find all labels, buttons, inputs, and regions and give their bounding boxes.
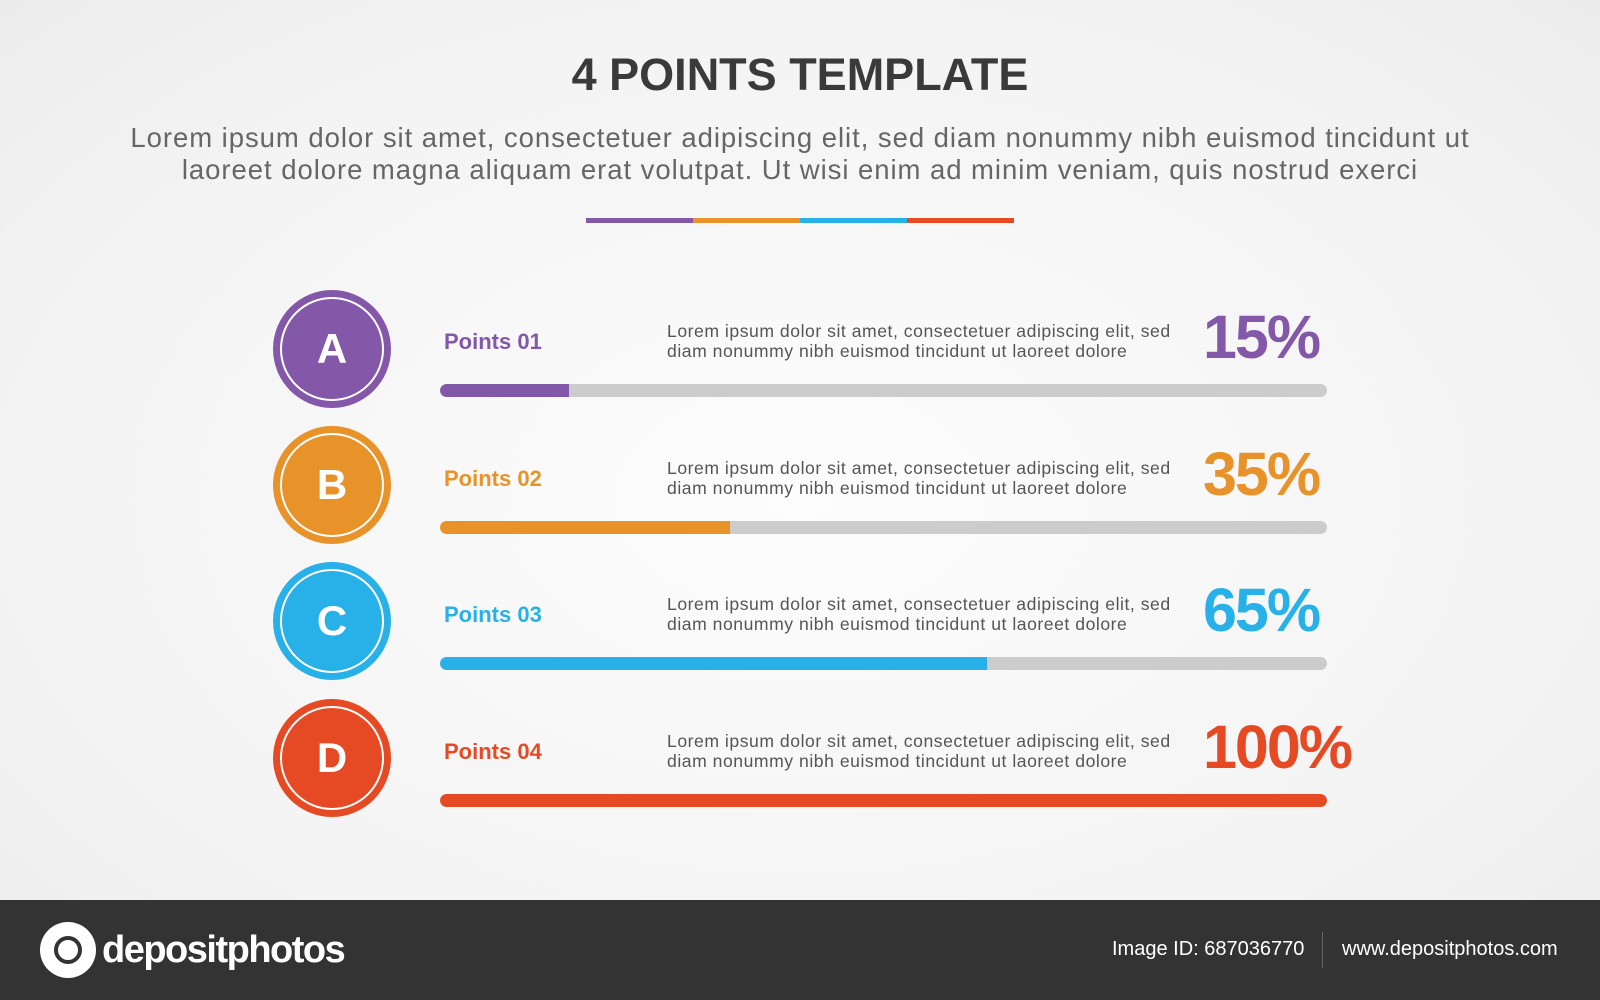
desc 01: diam nonummy nibh euismod tincidunt ut laoreet dolore: [667, 341, 1127, 361]
url: www.depositphotos.com: [1342, 938, 1558, 960]
bar 65: [440, 657, 1327, 670]
subtitle: Lorem ipsum dolor sit amet, consectetuer adipiscing elit, sed diam nonummy nibh euismod tincidunt ut: [130, 122, 1470, 153]
bar 35: [440, 521, 1327, 534]
label 04: Points 04: [444, 739, 542, 764]
logo text: depositphotos: [102, 929, 344, 971]
circle C: [273, 562, 391, 680]
desc 04: [667, 731, 1171, 771]
pct 35: 35%: [1203, 440, 1319, 508]
desc 03: diam nonummy nibh euismod tincidunt ut laoreet dolore: [667, 614, 1127, 634]
circle D: D: [317, 734, 347, 781]
pct 100: 100%: [1203, 713, 1351, 781]
title: 4 POINTS TEMPLATE: [572, 49, 1028, 100]
desc 04: diam nonummy nibh euismod tincidunt ut laoreet dolore: [667, 751, 1127, 771]
circle A: A: [317, 325, 347, 372]
label 02: Points 02: [444, 466, 542, 491]
circle B: [273, 426, 391, 544]
desc 03: Lorem ipsum dolor sit amet, consectetuer adipiscing elit, sed: [667, 594, 1171, 614]
desc 03: [667, 594, 1171, 634]
desc 01: Lorem ipsum dolor sit amet, consectetuer adipiscing elit, sed: [667, 321, 1171, 341]
desc 04: Lorem ipsum dolor sit amet, consectetuer adipiscing elit, sed: [667, 731, 1171, 751]
bar 100: [440, 794, 1327, 807]
image id: Image ID: 687036770: [1112, 938, 1304, 960]
desc 02: diam nonummy nibh euismod tincidunt ut laoreet dolore: [667, 478, 1127, 498]
color divider: [586, 218, 1014, 223]
pct 65: 65%: [1203, 576, 1319, 644]
circle A: [273, 290, 391, 408]
desc 01: [667, 321, 1171, 361]
footer: [0, 900, 1600, 1000]
circle C: C: [317, 597, 347, 644]
subtitle: laoreet dolore magna aliquam erat volutpat. Ut wisi enim ad minim veniam, quis nostrud exerci: [182, 154, 1418, 185]
circle B: B: [317, 461, 347, 508]
icon: camera: [40, 922, 96, 978]
label 01: Points 01: [444, 329, 542, 354]
bar 15: [440, 384, 1327, 397]
desc 02: [667, 458, 1171, 498]
label 03: Points 03: [444, 602, 542, 627]
footer logo: [40, 922, 344, 978]
pct 15: 15%: [1203, 303, 1319, 371]
desc 02: Lorem ipsum dolor sit amet, consectetuer adipiscing elit, sed: [667, 458, 1171, 478]
subtitle: [130, 122, 1470, 185]
circle D: [273, 699, 391, 817]
